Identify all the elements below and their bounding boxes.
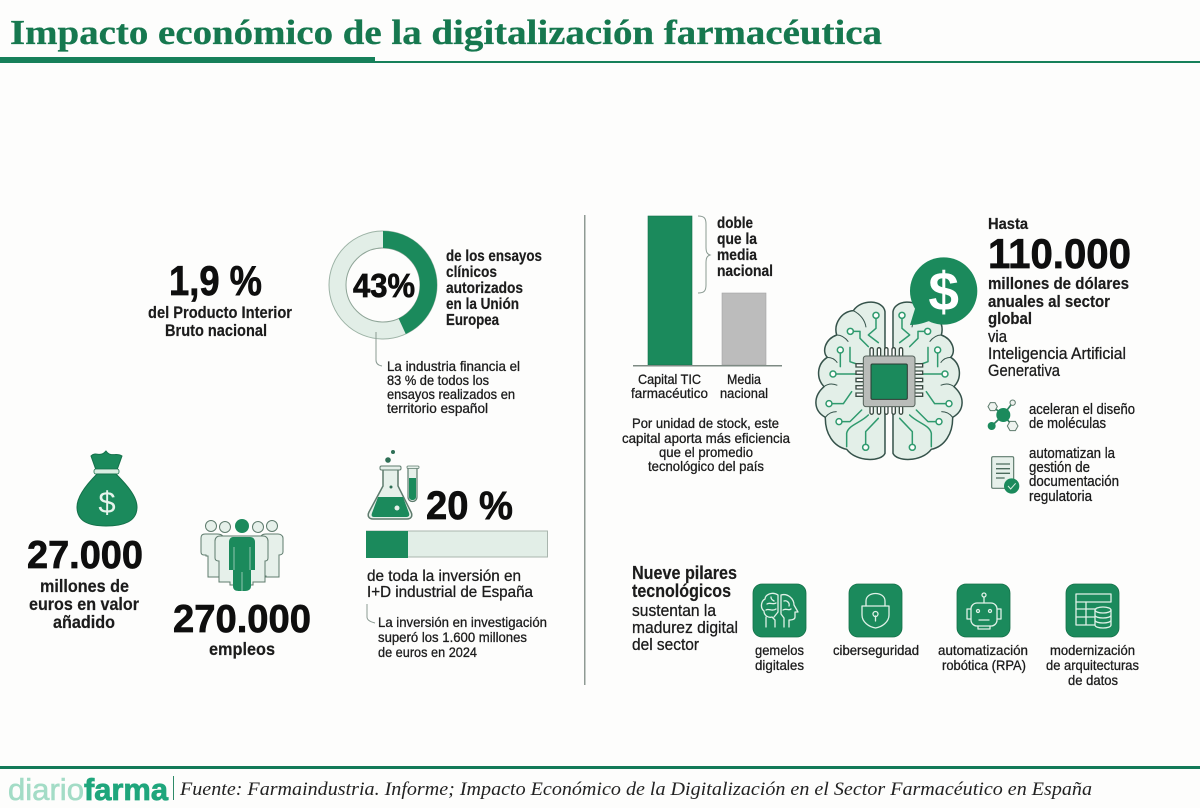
text: ensayos clínicos: Europea: [446, 312, 499, 329]
icon: money bag: $: [98, 485, 116, 520]
pillar: ciberseguridad: [833, 584, 919, 658]
logo: diariofarma: [8, 772, 169, 807]
bar chart: capital TIC vs media nacional: [631, 215, 782, 401]
stat: 110.000 millones de dólares: Inteligencia Artificial: [988, 345, 1126, 363]
stat: 110.000 millones de dólares: 110.000: [988, 230, 1131, 277]
header: [0, 13, 1200, 63]
pillar: modernización de arquitecturas de datos: de arquitecturas: [1046, 657, 1139, 673]
stat: 110.000 millones de dólares: anuales al sector: [988, 293, 1111, 311]
pillar: gemelos digitales: digitales: [755, 657, 804, 673]
text: eficiencia del capital: que el promedio: [659, 444, 753, 460]
donut chart: 43%: [329, 231, 437, 339]
stat: 110.000 millones de dólares: via: [988, 328, 1008, 346]
pillar: automatización robótica: automatización: [938, 642, 1028, 658]
icon: molecule: [988, 400, 1018, 431]
callout: financiación de ensayos: territorio español: [387, 400, 488, 416]
bar chart: capital TIC vs media nacional: que la: [717, 231, 757, 248]
stat: 27.000 millones: euros en valor: [29, 594, 139, 614]
text: diseño de moléculas: aceleran el diseño: [1029, 402, 1135, 418]
pillar: ciberseguridad: ciberseguridad: [833, 642, 919, 658]
stat: 1,9 % PIB: del Producto Interior: [148, 303, 292, 322]
footer: [0, 766, 1200, 807]
source text: Fuente: Farmaindustria. Informe; Impacto Económico de la Digitalización en el Sector Farmacéutico en España: [179, 780, 1092, 800]
logo: diariofarma: diario: [8, 772, 84, 807]
pillar: automatización robótica: [938, 584, 1028, 673]
title: Impacto económico de la digitalización farmacéutica: [10, 13, 882, 52]
bar chart: capital TIC vs media nacional: nacional: [717, 263, 773, 280]
icon: brain with chip and dollar bubble: [816, 257, 977, 459]
text: diseño de moléculas: [1029, 402, 1135, 432]
stat: 1,9 % PIB: [148, 257, 292, 340]
stat: 110.000 millones de dólares: Generativa: [988, 362, 1061, 380]
callout: financiación de ensayos: [376, 332, 520, 416]
stat: 270.000 empleos: 270.000: [173, 598, 311, 641]
bar chart: capital TIC vs media nacional: doble: [717, 215, 753, 232]
text: inversión en I+D: de toda la inversión en: [367, 568, 521, 585]
text: nueve pilares tecnológicos: Nueve pilares: [632, 562, 737, 583]
text: diseño de moléculas: de moléculas: [1029, 416, 1106, 432]
icon: people: [201, 519, 283, 591]
callout: inversión en investigación: La inversión en investigación: [378, 614, 547, 630]
text: nueve pilares tecnológicos: tecnológicos: [632, 580, 731, 601]
stat: 110.000 millones de dólares: global: [988, 310, 1032, 328]
stat: 27.000 millones: millones de: [40, 576, 129, 596]
text: eficiencia del capital: [622, 415, 790, 474]
stat: 270.000 empleos: [173, 598, 311, 659]
icon: money bag: [77, 451, 137, 526]
stat: 27.000 millones: añadido: [53, 612, 115, 632]
stat: 20 %: 20 %: [426, 484, 513, 528]
bar chart: capital TIC vs media nacional: farmacéutico: [631, 385, 708, 401]
text: ensayos clínicos: clínicos: [446, 264, 497, 281]
stat: 270.000 empleos: empleos: [209, 639, 275, 659]
bar chart: capital TIC vs media nacional: nacional: [720, 385, 768, 401]
text: documentación regulatoria: automatizan la: [1029, 446, 1116, 462]
icon: brain with chip and dollar bubble: $: [928, 261, 959, 323]
callout: inversión en investigación: de euros en 2024: [378, 644, 477, 660]
text: documentación regulatoria: regulatoria: [1029, 489, 1093, 505]
callout: financiación de ensayos: ensayos realizados en: [387, 386, 515, 402]
text: eficiencia del capital: capital aporta más eficiencia: [622, 430, 790, 446]
text: nueve pilares tecnológicos: madurez digital: [632, 618, 738, 637]
text: documentación regulatoria: gestión de: [1029, 460, 1090, 476]
text: ensayos clínicos: en la Unión: [446, 296, 519, 313]
logo: diariofarma: farma: [84, 772, 169, 807]
bar chart: capital TIC vs media nacional: media: [717, 247, 757, 264]
callout: financiación de ensayos: La industria financia el: [387, 358, 520, 374]
donut chart: 43%: 43%: [353, 267, 415, 304]
stat: 1,9 % PIB: Bruto nacional: [165, 321, 267, 340]
callout: financiación de ensayos: 83 % de todos los: [387, 372, 489, 388]
text: inversión en I+D: [367, 568, 533, 601]
text: inversión en I+D: I+D industrial de España: [367, 584, 533, 601]
pillar: modernización de arquitecturas de datos: [1046, 584, 1139, 688]
text: documentación regulatoria: documentación: [1029, 474, 1119, 490]
stat: 27.000 millones: 27.000: [27, 534, 143, 577]
icon: flask and test tube: [368, 450, 419, 519]
stat: 1,9 % PIB: 1,9 %: [169, 257, 262, 304]
pillar: modernización de arquitecturas de datos: de datos: [1068, 672, 1118, 688]
text: nueve pilares tecnológicos: [632, 562, 738, 654]
callout: inversión en investigación: [367, 604, 547, 660]
text: eficiencia del capital: Por unidad de stock, este: [632, 415, 779, 431]
stat: 27.000 millones: [27, 534, 143, 632]
pillar: automatización robótica: robótica (RPA): [942, 657, 1026, 673]
progress bar: 20 %: [366, 531, 548, 558]
text: eficiencia del capital: tecnológico del país: [648, 458, 764, 474]
text: ensayos clínicos: autorizados: [446, 280, 523, 297]
text: ensayos clínicos: de los ensayos: [446, 248, 542, 265]
text: ensayos clínicos: [446, 248, 542, 329]
pillar: gemelos digitales: [753, 584, 806, 673]
pillar: modernización de arquitecturas de datos: modernización: [1050, 642, 1135, 658]
text: documentación regulatoria: [1029, 446, 1119, 505]
stat: 110.000 millones de dólares: [988, 216, 1131, 380]
text: nueve pilares tecnológicos: sustentan la: [632, 601, 716, 620]
stat: 110.000 millones de dólares: millones de dólares: [988, 275, 1129, 293]
stat: 110.000 millones de dólares: Hasta: [988, 216, 1028, 233]
callout: inversión en investigación: superó los 1.600 millones: [378, 629, 527, 645]
pillar: gemelos digitales: gemelos: [755, 642, 804, 658]
text: nueve pilares tecnológicos: del sector: [632, 635, 699, 654]
bar chart: capital TIC vs media nacional: Media: [727, 371, 761, 387]
bar chart: capital TIC vs media nacional: Capital TIC: [638, 371, 701, 387]
icon: document with check: [992, 457, 1019, 494]
